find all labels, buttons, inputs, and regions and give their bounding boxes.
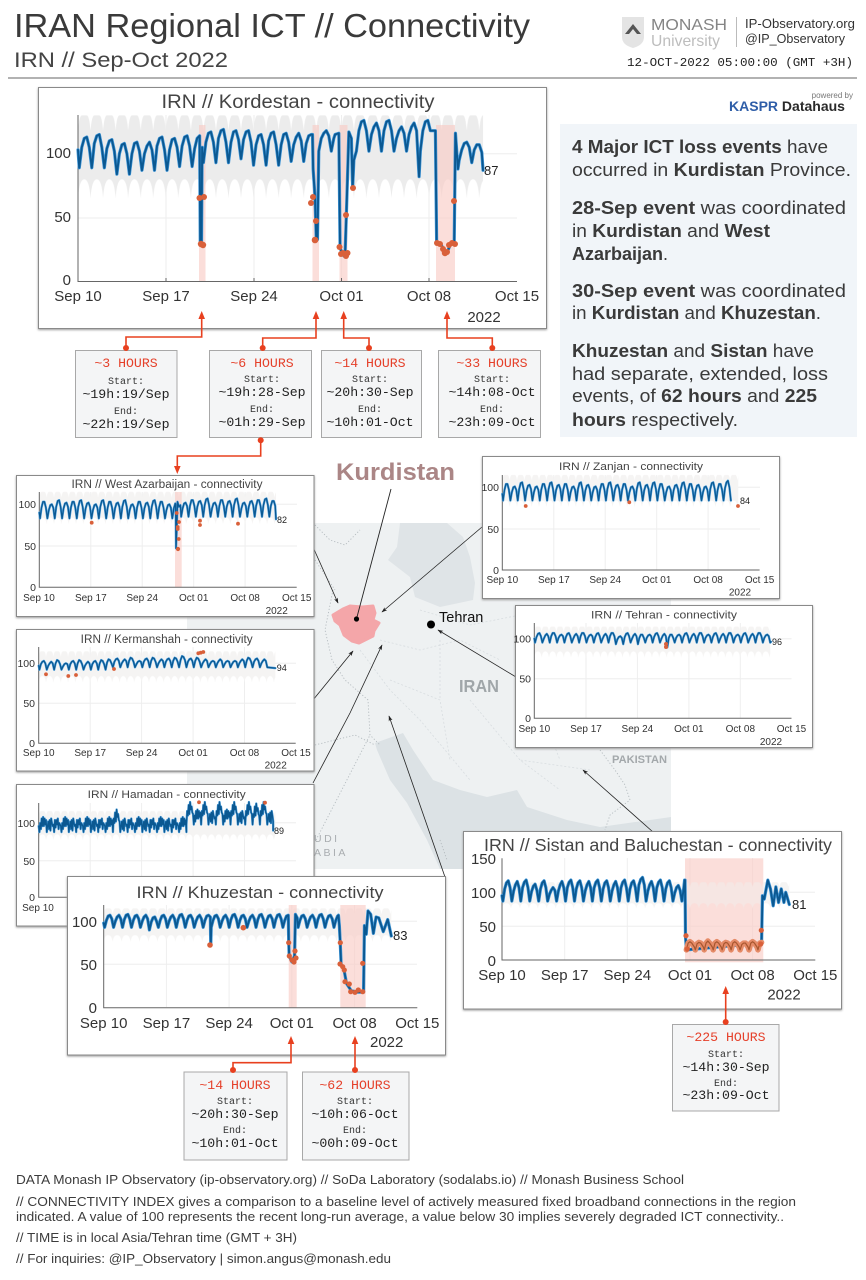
chart: Kordestan connectivity: 2022 <box>467 309 501 326</box>
chart: Kordestan connectivity: Oct 01 <box>319 288 364 305</box>
callout: 3 hours event <box>76 350 177 438</box>
chart: Khuzestan connectivity: Oct 08 <box>333 1015 377 1032</box>
chart: Sistan and Baluchestan connectivity: Oct 08 <box>731 967 775 984</box>
chart: Hamadan connectivity: 50 <box>23 856 35 868</box>
chart: Kermanshah connectivity: Oct 01 <box>178 748 208 759</box>
Tehran marker and label: Tehran <box>439 610 483 626</box>
callout: Khuzestan 14 hours: ~10h:01-Oct <box>191 1136 279 1151</box>
panel: key findings: Khuzestan and Sistan have <box>572 340 814 361</box>
chart: Khuzestan connectivity: 50 <box>80 957 97 974</box>
chart: Sistan and Baluchestan connectivity: IRN // Sistan and Baluchestan - connectivity <box>484 835 832 855</box>
callout: Sistan 225 hours: End: <box>714 1078 738 1090</box>
callout: Khuzestan 14 hours: Start: <box>217 1097 253 1108</box>
chart: Sistan and Baluchestan connectivity: 100 <box>471 885 496 902</box>
chart: Hamadan connectivity: 89 <box>274 826 284 836</box>
footer notes: // CONNECTIVITY INDEX gives a comparison to a baseline level of actively measured fixed broadband connections in the region <box>16 1194 796 1209</box>
chart: Sistan and Baluchestan connectivity: Sep 17 <box>541 967 588 984</box>
chart: Khuzestan connectivity: 2022 <box>370 1034 403 1051</box>
chart: Kordestan connectivity: Oct 15 <box>495 288 539 305</box>
outage trace <box>686 941 762 950</box>
chart: Hamadan connectivity: IRN // Hamadan - connectivity <box>88 789 246 801</box>
callout: 3 hours event: ~22h:19/Sep <box>82 417 170 432</box>
footer notes: // TIME is in local Asia/Tehran time (GMT + 3H) <box>16 1230 297 1245</box>
chart: Kordestan connectivity: IRN // Kordestan - connectivity <box>162 92 435 113</box>
chart: Zanjan connectivity: Oct 15 <box>745 575 775 586</box>
chart: Khuzestan connectivity: 83 <box>393 928 407 943</box>
IP Observatory credits: IP-Observatory.org <box>745 17 855 31</box>
chart: Kordestan connectivity: 50 <box>54 209 71 226</box>
chart: Kermanshah connectivity <box>16 630 314 772</box>
callout: 6 hours event: ~6 HOURS <box>230 356 294 371</box>
callout: 33 hours event: ~23h:09-Oct <box>448 415 536 430</box>
chart: Kermanshah connectivity: 0 <box>29 738 35 750</box>
chart: Hamadan connectivity <box>16 784 314 926</box>
chart: Tehran connectivity: Sep 24 <box>622 724 654 735</box>
Kurdistan province <box>333 606 379 643</box>
chart: Zanjan connectivity: 0 <box>493 565 499 577</box>
chart: Zanjan connectivity: Oct 08 <box>693 575 723 586</box>
panel: key findings <box>560 124 857 437</box>
chart: Kordestan connectivity <box>38 88 546 328</box>
logo: Monash University shield and wordmark: MONASH <box>651 17 727 34</box>
callout: 14 hours event: ~20h:30-Sep <box>326 385 414 400</box>
chart: Khuzestan connectivity <box>68 876 446 1055</box>
chart: Khuzestan connectivity: Sep 17 <box>143 1015 190 1032</box>
chart: Tehran connectivity: 2022 <box>760 737 783 748</box>
Tehran marker and label <box>427 610 483 628</box>
Kurdistan pointer <box>354 489 391 622</box>
callout: Sistan 225 hours: ~225 HOURS <box>686 1030 766 1045</box>
chart: Khuzestan connectivity: 0 <box>89 1000 97 1017</box>
label: Saudi Arabia <box>314 833 348 859</box>
chart: West Azarbaijan connectivity: 0 <box>30 582 36 594</box>
callout: 6 hours event: ~01h:29-Sep <box>218 415 306 430</box>
chart: Zanjan connectivity: 84 <box>740 496 750 506</box>
chart: Zanjan connectivity: Sep 24 <box>589 575 621 586</box>
chart: Sistan and Baluchestan connectivity: 2022 <box>767 986 801 1004</box>
panel: key findings: 30-Sep event was coordinated <box>572 280 846 301</box>
panel: key findings: hours respectively. <box>572 409 738 430</box>
panel: key findings: events, of 62 hours and 225 <box>572 385 817 406</box>
chart: Tehran connectivity: Sep 10 <box>518 724 551 735</box>
chart: Kordestan connectivity: Sep 17 <box>142 288 190 305</box>
callout: 6 hours event <box>210 350 312 438</box>
callout: Khuzestan 62 hours <box>302 1072 409 1160</box>
chart: Kordestan connectivity: 0 <box>63 272 71 289</box>
callout: Khuzestan 62 hours: ~00h:09-Oct <box>311 1136 399 1151</box>
red connector arrows <box>123 311 729 1073</box>
panel: key findings: occurred in Kurdistan Province. <box>572 159 851 180</box>
callout: Sistan 225 hours: ~23h:09-Oct <box>682 1088 770 1103</box>
chart: Sistan and Baluchestan connectivity: 50 <box>479 919 496 936</box>
callout: Khuzestan 62 hours: Start: <box>337 1097 373 1108</box>
chart: West Azarbaijan connectivity <box>16 476 314 617</box>
chart: West Azarbaijan connectivity: 82 <box>277 515 287 525</box>
chart: West Azarbaijan connectivity: Sep 17 <box>75 593 107 604</box>
callout: 6 hours event: End: <box>250 404 274 416</box>
panel: key findings: Azarbaijan. <box>572 243 668 264</box>
chart: Kordestan connectivity: 100 <box>46 145 71 162</box>
callout: 3 hours event: End: <box>114 406 138 418</box>
chart: Sistan and Baluchestan connectivity: 81 <box>792 897 806 912</box>
callout: 6 hours event: Start: <box>244 375 280 386</box>
panel: key findings: 4 Major ICT loss events have <box>572 136 828 157</box>
chart: West Azarbaijan connectivity: Oct 08 <box>230 593 260 604</box>
callout: Khuzestan 14 hours: End: <box>223 1125 247 1137</box>
chart: Sistan and Baluchestan connectivity: Oct 15 <box>793 967 837 984</box>
chart: Kordestan connectivity: Oct 08 <box>407 288 451 305</box>
subtitle: IRN // Sep-Oct 2022 <box>14 49 228 72</box>
chart: Zanjan connectivity <box>481 456 780 598</box>
callout: 14 hours event <box>322 350 422 438</box>
chart: Tehran connectivity: 100 <box>513 634 531 646</box>
chart: West Azarbaijan connectivity: 100 <box>18 499 36 511</box>
chart: West Azarbaijan connectivity: 2022 <box>266 606 288 617</box>
callout: Khuzestan 62 hours: ~62 HOURS <box>319 1078 391 1093</box>
chart: Tehran connectivity <box>513 606 812 748</box>
map of Iran region <box>187 523 671 869</box>
callout: Sistan 225 hours <box>672 1024 779 1111</box>
callout: 33 hours event: ~14h:08-Oct <box>448 385 536 400</box>
panel: key findings: had separate, extended, loss <box>572 363 828 384</box>
chart: Sistan and Baluchestan connectivity: Oct 01 <box>668 967 712 984</box>
chart: Kermanshah connectivity: 2022 <box>265 760 287 772</box>
callout: 3 hours event: Start: <box>108 377 144 388</box>
chart: Hamadan connectivity: 0 <box>29 892 35 904</box>
footer notes <box>16 1172 796 1266</box>
chart: Khuzestan connectivity: IRN // Khuzestan - connectivity <box>136 883 384 902</box>
chart: Sistan and Baluchestan connectivity: 150 <box>471 851 496 868</box>
panel: key findings: in Kurdistan and Khuzestan. <box>572 302 821 323</box>
chart: Tehran connectivity: 96 <box>772 637 782 647</box>
label: IRAN: IRAN <box>459 676 499 696</box>
chart: Kermanshah connectivity: Sep 24 <box>126 748 158 759</box>
chart: Khuzestan connectivity: Oct 01 <box>270 1015 314 1032</box>
chart: Zanjan connectivity: 2022 <box>729 588 752 598</box>
date stamp: 12-OCT-2022 05:00:00 (GMT +3H) <box>627 56 853 70</box>
chart: Khuzestan connectivity: Sep 10 <box>80 1015 127 1032</box>
chart: West Azarbaijan connectivity: Sep 10 <box>23 593 55 604</box>
chart: Khuzestan connectivity: 100 <box>72 914 97 931</box>
callout: 14 hours event: Start: <box>352 375 388 386</box>
chart: Kermanshah connectivity: Oct 15 <box>281 748 311 759</box>
chart: Tehran connectivity: Oct 01 <box>674 724 704 735</box>
callout: Khuzestan 14 hours: ~14 HOURS <box>199 1078 271 1093</box>
callout: 33 hours event <box>438 350 540 438</box>
chart: Sistan and Baluchestan connectivity: 0 <box>488 953 496 970</box>
chart: Kermanshah connectivity: Sep 10 <box>23 748 55 759</box>
arrows from charts to map regions <box>313 527 653 877</box>
chart: West Azarbaijan connectivity: IRN // West Azarbaijan - connectivity <box>72 479 263 491</box>
chart: Kermanshah connectivity: IRN // Kermanshah - connectivity <box>81 634 253 646</box>
chart: Kordestan connectivity: 87 <box>484 163 498 178</box>
logo: Monash University shield and wordmark: University <box>651 33 720 50</box>
chart: Zanjan connectivity: 100 <box>481 482 499 494</box>
chart: Kermanshah connectivity: 50 <box>23 698 35 710</box>
powered by KASPR Datahaus <box>729 91 853 114</box>
callout: Khuzestan 62 hours: ~10h:06-Oct <box>311 1107 399 1122</box>
chart: Zanjan connectivity: Oct 01 <box>642 575 672 586</box>
chart: West Azarbaijan connectivity: 50 <box>24 541 36 553</box>
chart: Zanjan connectivity: IRN // Zanjan - connectivity <box>559 461 704 473</box>
chart: Sistan and Baluchestan connectivity: Sep 24 <box>604 967 651 984</box>
chart: Kermanshah connectivity: Oct 08 <box>230 748 260 759</box>
chart: Sistan and Baluchestan connectivity <box>464 832 842 1009</box>
chart: Kordestan connectivity: Sep 10 <box>54 288 102 305</box>
footer notes: DATA Monash IP Observatory (ip-observatory.org) // SoDa Laboratory (sodalabs.io) // Monash Business School <box>16 1172 684 1187</box>
chart: Kordestan connectivity: Sep 24 <box>230 288 278 305</box>
chart: Sistan and Baluchestan connectivity: Sep 10 <box>478 967 526 984</box>
callout: Khuzestan 14 hours: ~20h:30-Sep <box>191 1107 279 1122</box>
chart: Tehran connectivity: Sep 17 <box>570 724 602 735</box>
chart: Kermanshah connectivity: Sep 17 <box>74 748 106 759</box>
chart: Tehran connectivity: Oct 15 <box>777 724 807 735</box>
chart: Tehran connectivity: IRN // Tehran - connectivity <box>591 610 738 622</box>
callout: 14 hours event: ~14 HOURS <box>334 356 406 371</box>
chart: Khuzestan connectivity: Sep 24 <box>205 1015 253 1032</box>
callout: 3 hours event: ~19h:19/Sep <box>82 387 170 402</box>
chart: Tehran connectivity: Oct 08 <box>726 724 755 735</box>
logo: Monash University shield and wordmark <box>622 17 737 50</box>
chart: Tehran connectivity: 0 <box>525 713 531 725</box>
panel: key findings: in Kurdistan and West <box>572 220 770 241</box>
chart: West Azarbaijan connectivity: Sep 24 <box>126 593 158 604</box>
chart: Hamadan connectivity: Sep 10 <box>22 903 54 914</box>
callout: Sistan 225 hours: ~14h:30-Sep <box>682 1060 770 1075</box>
label: Saudi Arabia: UDI <box>314 833 340 845</box>
callout: 6 hours event: ~19h:28-Sep <box>218 385 306 400</box>
label: PAKISTAN: PAKISTAN <box>612 754 667 766</box>
chart: Hamadan connectivity: 100 <box>17 818 35 830</box>
callout: 14 hours event: ~10h:01-Oct <box>326 415 414 430</box>
chart: West Azarbaijan connectivity: Oct 01 <box>179 593 209 604</box>
chart: Kermanshah connectivity: 94 <box>277 663 287 673</box>
IP Observatory credits: @IP_Observatory <box>745 32 846 46</box>
powered by KASPR Datahaus: KASPR Datahaus <box>729 99 845 114</box>
callout: 33 hours event: End: <box>480 404 504 416</box>
chart: Zanjan connectivity: 50 <box>487 524 499 536</box>
powered by KASPR Datahaus: powered by <box>812 91 853 100</box>
footer notes: // For inquiries: @IP_Observatory | simon.angus@monash.edu <box>16 1251 391 1266</box>
callout: 33 hours event: ~33 HOURS <box>456 356 528 371</box>
label: Saudi Arabia: ABIA <box>314 847 348 859</box>
IP Observatory credits <box>745 17 855 46</box>
panel: key findings: 28-Sep event was coordinated <box>572 197 846 218</box>
chart: Tehran connectivity: 50 <box>519 674 531 686</box>
chart: Khuzestan connectivity: Oct 15 <box>395 1015 439 1032</box>
callout: Khuzestan 14 hours <box>184 1072 287 1160</box>
callout: Sistan 225 hours: Start: <box>708 1050 744 1061</box>
chart: West Azarbaijan connectivity: Oct 15 <box>282 593 312 604</box>
heading: Kurdistan: Kurdistan <box>336 459 455 486</box>
Persian Gulf and Gulf of Oman <box>375 733 671 869</box>
chart: Kermanshah connectivity: 100 <box>17 658 35 670</box>
callout: 14 hours event: End: <box>358 404 382 416</box>
footer notes: indicated. A value of 100 represents the recent long-run average, a value below 30 implies severely degraded ICT connectivity.. <box>16 1209 784 1224</box>
callout: Khuzestan 62 hours: End: <box>343 1125 367 1137</box>
Caspian Sea <box>388 523 475 607</box>
callout: 33 hours event: Start: <box>474 375 510 386</box>
callout: 3 hours event: ~3 HOURS <box>94 356 158 371</box>
chart: Zanjan connectivity: Sep 17 <box>538 575 570 586</box>
chart: Zanjan connectivity: Sep 10 <box>486 575 519 586</box>
title: IRAN Regional ICT // Connectivity <box>14 7 531 44</box>
